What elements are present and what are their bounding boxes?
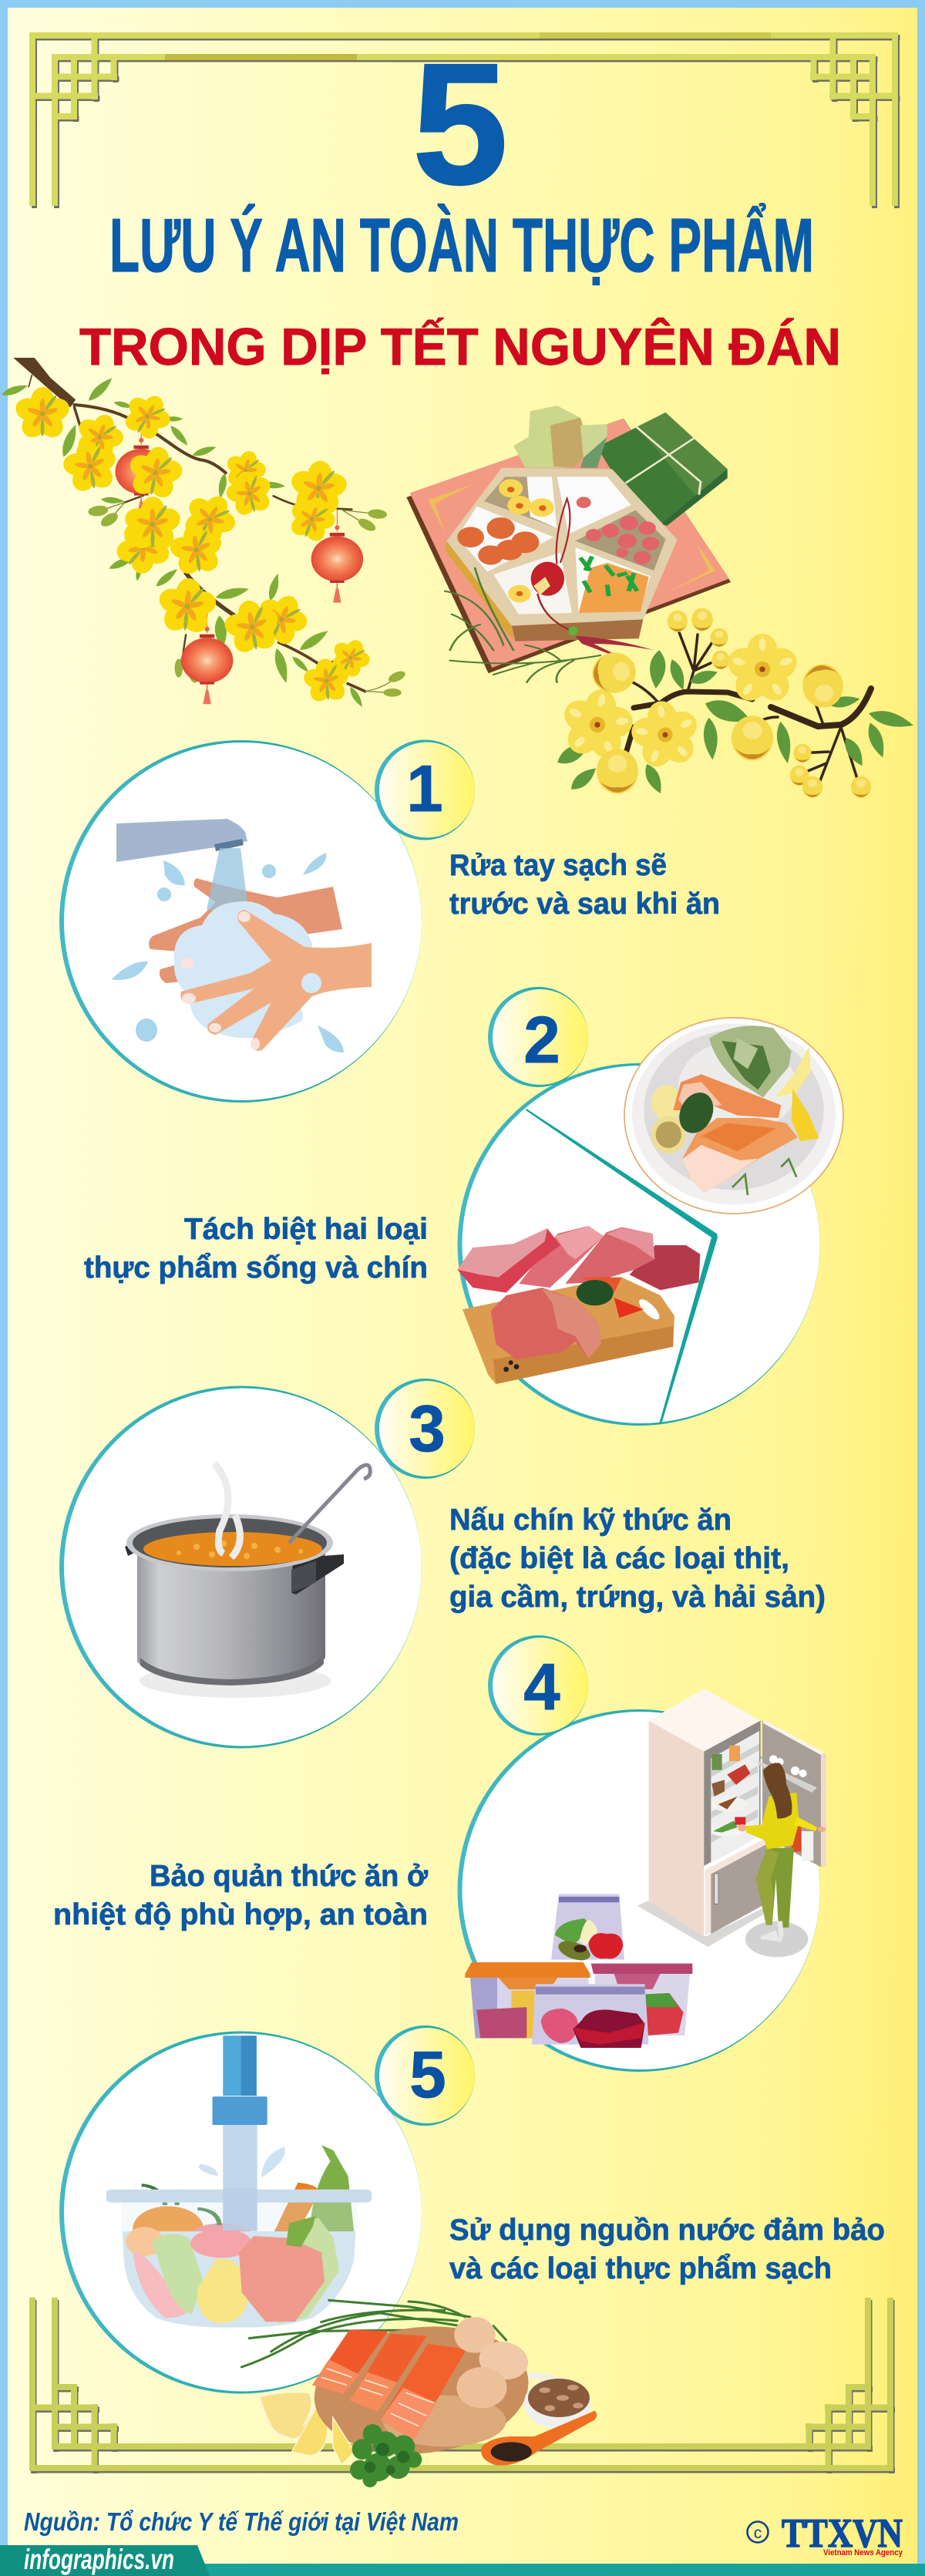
top decorative frame (29, 32, 900, 208)
text: step 1: trước và sau khi ăn (449, 887, 720, 921)
logo: TTXVN: c (754, 2524, 762, 2542)
subtitle: TRONG DỊP TẾT NGUYÊN ĐÁN: TRONG DỊP TẾT NGUYÊN ĐÁN (79, 317, 841, 376)
text: step 5: Sử dụng nguồn nước đảm bảo (449, 2214, 885, 2247)
icon: rosemary sprig (445, 568, 600, 682)
text: step 2 (84, 1213, 428, 1285)
circle (59, 1386, 422, 1749)
illustration: pale apricot branch (553, 608, 915, 798)
icon: cooked salmon plate (624, 1018, 843, 1214)
text: step 1: Rửa tay sạch sẽ (449, 849, 667, 882)
text: step 4: Bảo quản thức ăn ở (150, 1860, 428, 1893)
icon: raw meat on cutting board (457, 1226, 700, 1384)
icon: green cakes (513, 406, 607, 468)
logo: TTXVN (748, 2511, 903, 2557)
number badge 1: 1 (406, 753, 443, 826)
illustration: Tet food tray on pink mat (406, 406, 731, 682)
number badge 1 (375, 740, 475, 840)
text: step 5: và các loại thực phẩm sạch (449, 2252, 832, 2285)
icon: pink mat (406, 419, 731, 673)
text: step 2: Tách biệt hai loại (184, 1213, 428, 1246)
icon: bowl of fruit under running water (106, 2036, 372, 2328)
bottom decorative frame (29, 2298, 895, 2473)
panel: step 5 clean water and food (59, 2025, 475, 2393)
logo: TTXVN: TTXVN (782, 2511, 903, 2556)
text: step 3: gia cầm, trứng, và hải sản) (449, 1581, 826, 1614)
number badge 3 (375, 1379, 475, 1479)
footer bar (0, 2544, 925, 2576)
text: step 4: nhiệt độ phù hợp, an toàn (53, 1898, 428, 1931)
number badge 2 (488, 987, 588, 1087)
number badge 4 (488, 1635, 588, 1736)
text: step 3: Nấu chín kỹ thức ăn (449, 1504, 732, 1537)
circle (458, 1063, 820, 1426)
circle (59, 2031, 422, 2393)
title number 5: 5 (412, 28, 508, 221)
number badge 5 (375, 2025, 475, 2126)
illustration: salmon, eggs and spices on a wooden board (241, 2300, 597, 2487)
icon: washing hands under a tap (112, 819, 372, 1052)
text: step 5 (449, 2214, 885, 2285)
text: step 4 (53, 1860, 428, 1931)
panel: step 1 wash hands (59, 740, 475, 1103)
text: step 2: thực phẩm sống và chín (84, 1251, 428, 1285)
footer bar: infographics.vn (24, 2544, 174, 2575)
icon: square sticky rice cake (597, 412, 728, 526)
circle (59, 740, 422, 1103)
divider wedge line (526, 1109, 718, 1424)
panel: step 3 cook thoroughly (59, 1379, 475, 1749)
icon: soup pot with ladle (125, 1463, 370, 1698)
text: step 3: (đặc biệt là các loại thịt, (449, 1542, 789, 1575)
icon: hexagonal tray (445, 468, 678, 665)
source note: Nguồn: Tổ chức Y tế Thế giới tại Việt Nam (24, 2507, 459, 2536)
logo: TTXVN: Vietnam News Agency (823, 2548, 903, 2557)
number badge 5: 5 (409, 2039, 446, 2112)
number badge 3: 3 (409, 1392, 446, 1466)
number badge 2: 2 (523, 1004, 560, 1077)
text: step 3 (449, 1504, 826, 1614)
panel: step 4 store food safely (458, 1635, 826, 2072)
panel: step 2 separate raw and cooked food (457, 987, 843, 1426)
number badge 4: 4 (523, 1651, 560, 1724)
text: step 1 (449, 849, 720, 921)
circle (458, 1709, 820, 2072)
illustration: yellow apricot branch with lanterns (0, 358, 407, 709)
icon: woman at open refrigerator (637, 1689, 826, 1957)
icon: food storage containers (465, 1894, 692, 2048)
